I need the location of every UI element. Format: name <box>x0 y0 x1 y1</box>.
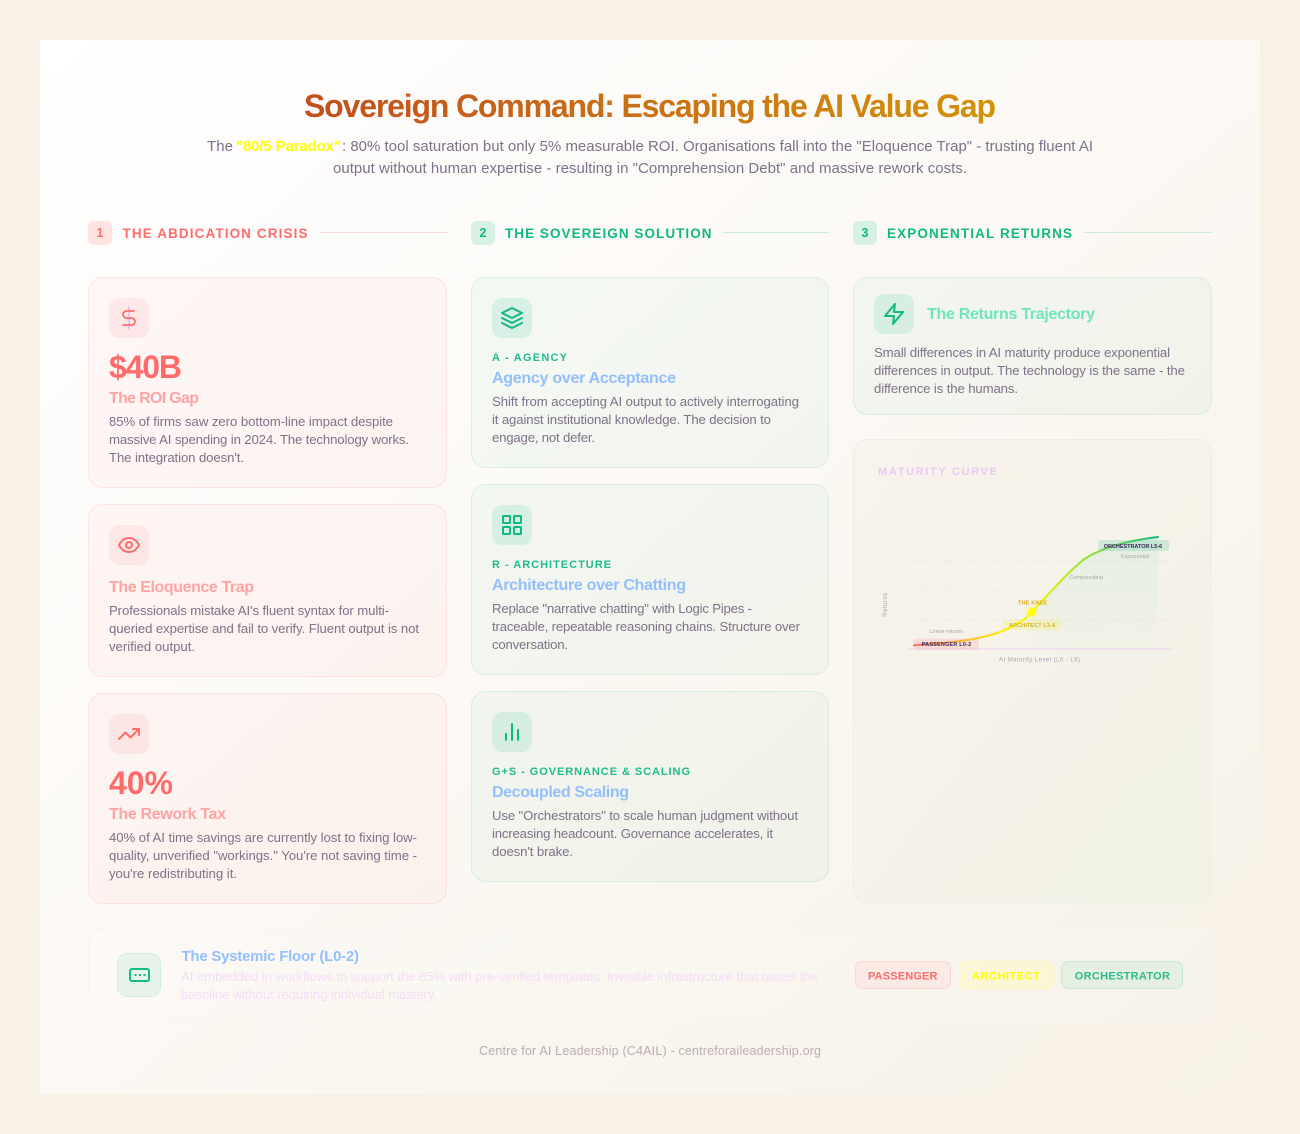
card text <box>492 601 801 652</box>
title: Sovereign Command: Escaping the AI Value Gap <box>304 88 996 124</box>
floor text <box>181 969 818 1002</box>
column 2 heading: 2 <box>480 226 487 240</box>
card title: The Returns Trajectory <box>927 306 1095 323</box>
panel: maturity curve <box>854 440 1212 904</box>
stat: 40% <box>109 765 173 801</box>
legend pill: passenger: PASSENGER <box>868 970 938 982</box>
card text: traceable, repeatable reasoning chains. Structure over <box>492 619 801 634</box>
panel: systemic floor <box>88 928 1212 1020</box>
legend pill: architect: ARCHITECT <box>972 970 1040 982</box>
icon: bar chart <box>492 712 532 752</box>
card text: Professionals mistake AI's fluent syntax for multi- <box>109 603 389 618</box>
icon: grid <box>492 505 532 545</box>
tag: R - ARCHITECTURE <box>492 559 611 571</box>
line chart: maturity curve: ARCHITECT L3-4 <box>1009 623 1056 629</box>
card text: you're redistributing it. <box>109 866 237 881</box>
legend pill: orchestrator: ORCHESTRATOR <box>1075 970 1170 982</box>
panel: eloquence trap <box>88 504 446 676</box>
panel: architecture <box>472 484 828 674</box>
legend pill: architect <box>960 962 1052 988</box>
card text: it against institutional knowledge. The decision to <box>492 412 771 427</box>
line chart: maturity curve: Returns <box>883 593 889 617</box>
card text: queried expertise and fail to verify. Fluent output is not <box>109 621 419 636</box>
subtitle: output without human expertise - resulting in "Comprehension Debt" and massive rework costs. <box>333 160 967 177</box>
card text <box>109 830 417 881</box>
footer: Centre for AI Leadership (C4AIL) - centreforaileadership.org <box>479 1044 821 1058</box>
line chart: maturity curve <box>883 537 1172 664</box>
line chart: maturity curve: ORCHESTRATOR L5-6 <box>1104 544 1162 550</box>
panel: returns trajectory <box>854 278 1212 414</box>
floor title: The Systemic Floor (L0-2) <box>182 948 359 965</box>
column 1 heading <box>88 221 447 245</box>
tag: A - AGENCY <box>492 352 568 364</box>
floor text: AI embedded in workflows to support the 85% with pre-verified templates. Invisible infrastructure that raises the <box>181 969 818 984</box>
column 2 heading <box>471 221 829 245</box>
card title: Agency over Acceptance <box>492 370 676 387</box>
icon: eye <box>109 525 149 565</box>
icon: dollar <box>109 298 149 338</box>
card text: 85% of firms saw zero bottom-line impact despite <box>109 414 393 429</box>
subtitle: The <box>207 138 233 155</box>
subtitle: "80/5 Paradox" <box>236 138 341 155</box>
stat: $40B <box>109 349 182 385</box>
card text <box>874 345 1185 396</box>
subtitle <box>207 138 1093 177</box>
column 3 heading: EXPONENTIAL RETURNS <box>887 226 1072 241</box>
card text: quality, unverified "workings." You're not saving time - <box>109 848 417 863</box>
card text <box>109 414 409 465</box>
icon: trending up <box>109 714 149 754</box>
icon: floor terminal <box>118 954 160 996</box>
floor text: baseline without requiring individual mastery. <box>181 987 437 1002</box>
tag: G+S - GOVERNANCE & SCALING <box>492 766 690 778</box>
column 3 heading: 3 <box>862 226 869 240</box>
column 2 heading: THE SOVEREIGN SOLUTION <box>505 226 712 241</box>
line chart: maturity curve: Compounding <box>1069 575 1103 581</box>
card text <box>109 603 419 654</box>
line chart: maturity curve: PASSENGER L0-2 <box>922 642 971 648</box>
card text: increasing headcount. Governance accelerates, it <box>492 826 773 841</box>
card text: Small differences in AI maturity produce exponential <box>874 345 1170 360</box>
card text: 40% of AI time savings are currently lost to fixing low- <box>109 830 417 845</box>
card text: massive AI spending in 2024. The technology works. <box>109 432 409 447</box>
card text: Shift from accepting AI output to actively interrogating <box>492 394 799 409</box>
card text <box>492 394 799 445</box>
card title: The ROI Gap <box>109 390 199 407</box>
legend pill: passenger <box>856 962 950 988</box>
icon: lightning <box>874 294 914 334</box>
column 1 heading: THE ABDICATION CRISIS <box>122 226 308 241</box>
column 1 heading: 1 <box>97 226 104 240</box>
card title: Architecture over Chatting <box>492 577 686 594</box>
line chart: maturity curve: AI Maturity Level (L0 - L6) <box>999 658 1080 664</box>
subtitle: : 80% tool saturation but only 5% measurable ROI. Organisations fall into the "Eloquence Trap" - trusting fluent AI <box>342 138 1093 155</box>
column 3 heading <box>853 221 1212 245</box>
card text: difference is the humans. <box>874 381 1018 396</box>
line chart: maturity curve: Exponential <box>1121 554 1150 560</box>
panel: agency <box>472 278 828 468</box>
card title: The Eloquence Trap <box>109 579 254 596</box>
card text: Use "Orchestrators" to scale human judgment without <box>492 808 798 823</box>
header <box>207 88 1093 177</box>
card text: doesn't brake. <box>492 844 573 859</box>
panel: rework tax <box>88 694 446 904</box>
chart heading: MATURITY CURVE <box>878 466 997 478</box>
card title: Decoupled Scaling <box>492 784 629 801</box>
card text: The integration doesn't. <box>109 450 244 465</box>
card text: differences in output. The technology is the same - the <box>874 363 1185 378</box>
panel: governance and scaling <box>472 692 828 882</box>
card text: conversation. <box>492 637 568 652</box>
line chart: maturity curve: Linear returns <box>930 629 963 635</box>
card text: engage, not defer. <box>492 430 595 445</box>
card text: Replace "narrative chatting" with Logic Pipes - <box>492 601 752 616</box>
card text: verified output. <box>109 639 195 654</box>
card text <box>492 808 798 859</box>
legend pill: orchestrator <box>1062 962 1182 988</box>
line chart: maturity curve: THE KNEE <box>1018 600 1047 606</box>
icon: layers <box>492 298 532 338</box>
card title: The Rework Tax <box>109 806 226 823</box>
panel: ROI gap <box>88 278 446 488</box>
